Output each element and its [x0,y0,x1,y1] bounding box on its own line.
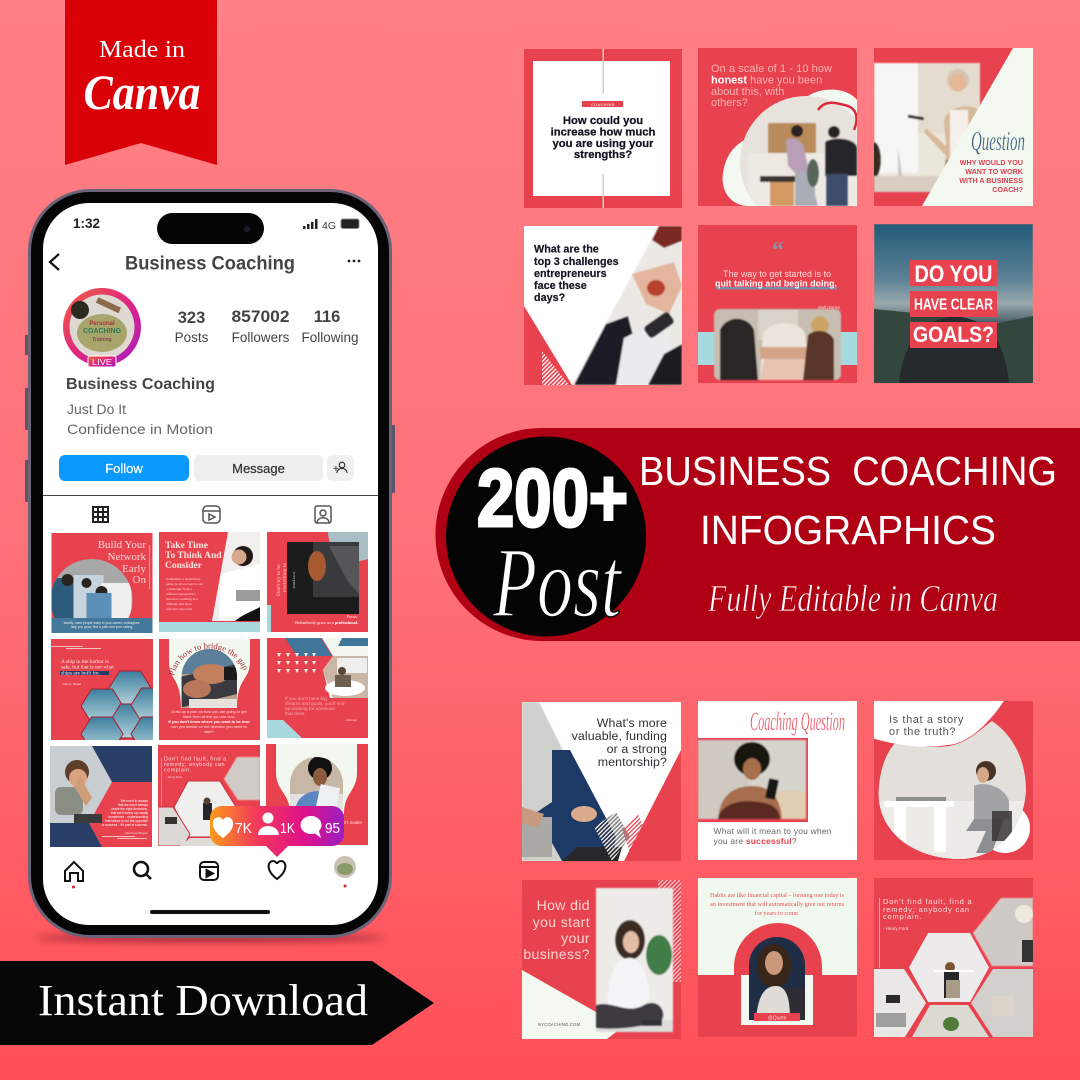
engagement notification bubble [210,806,344,857]
home indicator [150,910,270,914]
post card: question business coach: WITH A BUSINESS [959,176,1023,185]
profile stats [175,308,359,345]
central title banner [436,428,1080,641]
bio: Confidence in Motion [67,422,213,437]
phone grid post 1: Build Your [98,539,146,551]
label: have clear: HAVE CLEAR [914,296,993,314]
post card: on a scale of 1-10: On a scale of 1 - 10 how [711,63,832,75]
badge number: 200+ [477,453,628,544]
phone grid post 7: that failure is not the opposite [105,819,148,823]
post card: how did you start: NYCOACHING.COM [538,1022,580,1027]
post card: coaching question: What will it mean to you when [714,826,832,836]
avatar: Personal [89,321,115,327]
phone grid post 1: On [133,574,146,586]
phone grid post 5: take? [204,729,215,734]
phone grid post 8 [158,745,260,846]
follow button: Follow [105,461,143,476]
phone grid post 7: sometimes - understanding [108,815,148,819]
profile stats: Posts [175,330,209,345]
phone grid post 1: help you grow, find a path and your calling [71,625,132,629]
phone grid post 4: ships are built for. [61,670,100,676]
post card: funding or mentorship: What's more [597,716,667,730]
nav: reels [200,862,218,880]
label: goals: GOALS? [913,322,994,347]
post card: habits quote: @Quote [768,1016,787,1022]
post card: how could you increase [524,49,682,208]
avatar [63,288,141,367]
post card: story or truth: Is that a story [889,714,964,726]
message button: Message [232,461,285,476]
phone grid post 8: - Henry Ford [166,775,182,779]
phone grid post 2: a challenge from a [166,587,192,591]
post card: on a scale of 1-10 [698,48,857,206]
post card: story or truth: or the truth? [889,726,956,738]
tab: grid [93,507,108,522]
phone grid post 6: If you don't have big [285,696,327,701]
phone grid post 5: Plan how to bridge the gap [168,642,247,676]
phone grid post 3: Relentlessly grow as a professional. [295,620,358,625]
profile tabs [93,506,331,523]
phone grid post 5: there from where you are now. [183,714,235,719]
post card: habits quote: an investment that will automatically give out returns [710,901,845,908]
phone grid post 5: can you decide on the direction you need to [171,724,247,729]
post card: how did you start: your [561,930,590,946]
profile header [50,254,360,274]
post card: how could you increase: How could you [563,115,643,127]
back arrow [50,254,59,270]
post card: henry ford hexagons [874,878,1033,1037]
phone grid post 2: Sometimes a momentary [166,577,201,581]
avatar: COACHING [83,328,122,335]
post card: funding or mentorship: valuable, funding [572,729,667,743]
engagement notification bubble: 1K [280,820,295,837]
post card: funding or mentorship: mentorship? [598,755,667,769]
banner title line 2: INFOGRAPHICS [700,507,996,553]
post card: how could you increase: strengths? [574,149,632,161]
post card: habits quote: for years to come. [755,910,800,917]
post card: coaching question: you are successful? [714,836,797,846]
phone grid post 2: Take Time [165,541,208,551]
black circle badge [446,436,646,638]
engagement notification bubble: 95 [325,820,340,837]
label: do you: DO YOU [914,261,992,288]
bio: Just Do It [67,402,126,417]
phone grid post 1: Network [108,551,146,563]
post card: habits quote: Habits are like financial capital – forming one today is [710,892,845,899]
phone grid post 4: A ship in the harbor is [61,659,109,665]
post card: question business coach: WANT TO WORK [965,167,1024,176]
add person button: + [333,464,339,475]
phone grid post 5: Draw up a plan on how you are going to get [171,709,248,714]
post card: how did you start: you start [533,914,590,930]
nav: home [65,862,83,881]
post card: top 3 challenges: days? [534,292,565,304]
post card: question business coach: COACH? [992,185,1023,194]
post card: story or truth [874,701,1033,860]
post card: walt disney quote: Walt Disney [818,305,841,310]
phone grid post 7: that we won't always [118,803,148,807]
bio [66,376,215,437]
phone grid post 7: - Arianna Huffington [123,831,148,835]
phone grid post 6: that does. [285,711,306,716]
icon: speech bubble [300,816,322,838]
profile name heading: Business Coaching [125,254,295,274]
tab: tagged [315,506,331,523]
phone grid post 1: Ideally, meet people early in your career, colleagues [64,621,140,625]
post card: henry ford hexagons: remedy; anybody can [883,905,970,914]
add person button [327,455,354,481]
phone grid post 6: up working for someone [285,706,335,711]
tab: reels [203,506,220,523]
avatar: LIVE [92,357,112,367]
post card: how could you increase: COACHING [591,103,615,107]
phone grid post 2: different and more [166,602,192,606]
phone grid post 7: of success - it's part of success. [102,823,148,827]
phone grid post 1 [52,533,152,633]
phone grid post 7: We need to accept [121,799,148,803]
profile stats: Following [301,330,359,345]
post card: henry ford hexagons: complain. [883,912,922,921]
post card: how did you start: business? [523,946,590,962]
phone grid post 3 [267,532,368,632]
nav active dots [72,884,346,888]
ribbon text: canva: Canva [84,64,200,120]
phone grid post 7: that we'll screw up royally [111,811,148,815]
phone grid post 5 [159,639,260,740]
post card: top 3 challenges: What are the [534,244,599,256]
phone grid post 9 [266,744,368,845]
post card: how did you start: How did [537,897,590,913]
post card: top 3 challenges [524,226,682,385]
post card: habits quote [698,878,857,1037]
phone grid post 2 [159,532,260,632]
live badge [88,356,116,367]
nav: search [134,862,151,879]
label: have clear [910,291,997,317]
phone grid post 4: safe, but that is not what [61,664,114,670]
post card: question business coach [874,48,1033,206]
instant download text: Instant Download [38,976,368,1025]
icon: person [258,812,279,835]
phone grid post 3: Don't try to be [276,564,282,596]
profile stats: 323 [178,309,205,327]
made in canva ribbon [65,0,217,165]
profile stats: 857002 [232,308,290,326]
phone grid post 3: Focus. [347,614,358,619]
post card: henry ford hexagons: Don't find fault, find a [883,897,972,906]
status bar: 4G [322,220,336,232]
ribbon text: made in: Made in [99,37,185,63]
phone side buttons [25,335,395,502]
post card: how could you increase: increase how much [551,126,656,138]
post card: on a scale of 1-10: honest have you been [711,74,822,86]
profile stats: 116 [314,308,340,326]
phone grid post 1: Early [122,563,146,575]
status bar [73,213,359,244]
bottom navigation [65,856,356,888]
avatar: Training [92,337,112,343]
post card: funding or mentorship [522,702,681,861]
phone grid post 6: - Unknown [345,718,358,722]
phone grid post 8: Don't find fault, find a [164,756,226,762]
message button [194,455,323,481]
post card: do you have clear goals [874,224,1033,383]
post card: walt disney quote [698,225,857,383]
post card: henry ford hexagons: - Henry Ford [883,926,909,931]
post card: top 3 challenges: top 3 challenges [534,256,619,268]
post card: how did you start [522,880,681,1039]
post card: on a scale of 1-10: others? [711,97,748,109]
nav: activity heart [269,861,285,879]
post card: coaching question [698,701,857,860]
phone grid post 4 [51,639,153,740]
banner title line 1: BUSINESS COACHING [639,448,1057,494]
phone grid post 7 [50,746,152,847]
phone grid post 7: make the right decisions, [112,807,148,811]
icon: heart [213,817,233,838]
phone grid post 8: complain. [164,768,192,774]
phone grid post 6 [267,638,368,738]
phone grid post 2: pause is all we need to see [166,582,203,586]
post card: funding or mentorship: or a strong [607,742,667,756]
phone grid post 6: dreams and goals, you'll end [285,701,345,706]
phone grid post 2: different perspective, [166,592,196,597]
follow button [59,455,189,481]
post card: question business coach: WHY WOULD YOU [960,158,1023,167]
more menu [348,260,360,262]
instant download arrow banner [0,961,434,1045]
phone shadow [35,935,385,941]
post card: on a scale of 1-10: about this, with [711,86,784,98]
phone grid post 4: - John A. Shedd [61,682,81,686]
status bar: 1:32 [73,216,100,231]
nav: profile avatar [334,856,356,878]
phone grid post 2: To Think And [165,551,222,561]
phone grid post 8: remedy; anybody can [164,762,225,768]
phone grid post 9: Don't matter [338,820,363,825]
post card: top 3 challenges: face these [534,280,587,292]
banner subtitle: Fully Editable in Canva [707,578,998,620]
phone grid post 2: therefore resulting in a [166,597,198,601]
phone grid post 3: everything to [282,563,288,592]
post card: top 3 challenges: entrepreneurs [534,268,607,280]
badge script: Post [492,527,623,638]
engagement notification bubble: 7K [235,820,252,837]
phone grid post 2: Consider [165,561,203,571]
post card: walt disney quote: The way to get started is to [723,269,831,279]
phone mockup [25,189,395,938]
phone grid post 2: effective approach. [166,607,193,611]
bio: Business Coaching [66,376,215,393]
post card: walt disney quote: quit talking and begin doing. [715,278,837,288]
phone grid post 5: If you don't know where you want to be how [168,719,251,724]
phone grid post 3: everyone [292,572,297,588]
post card: how could you increase: you are using your [552,138,654,150]
post card: walt disney quote: “ [772,238,784,264]
profile stats: Followers [232,330,290,345]
